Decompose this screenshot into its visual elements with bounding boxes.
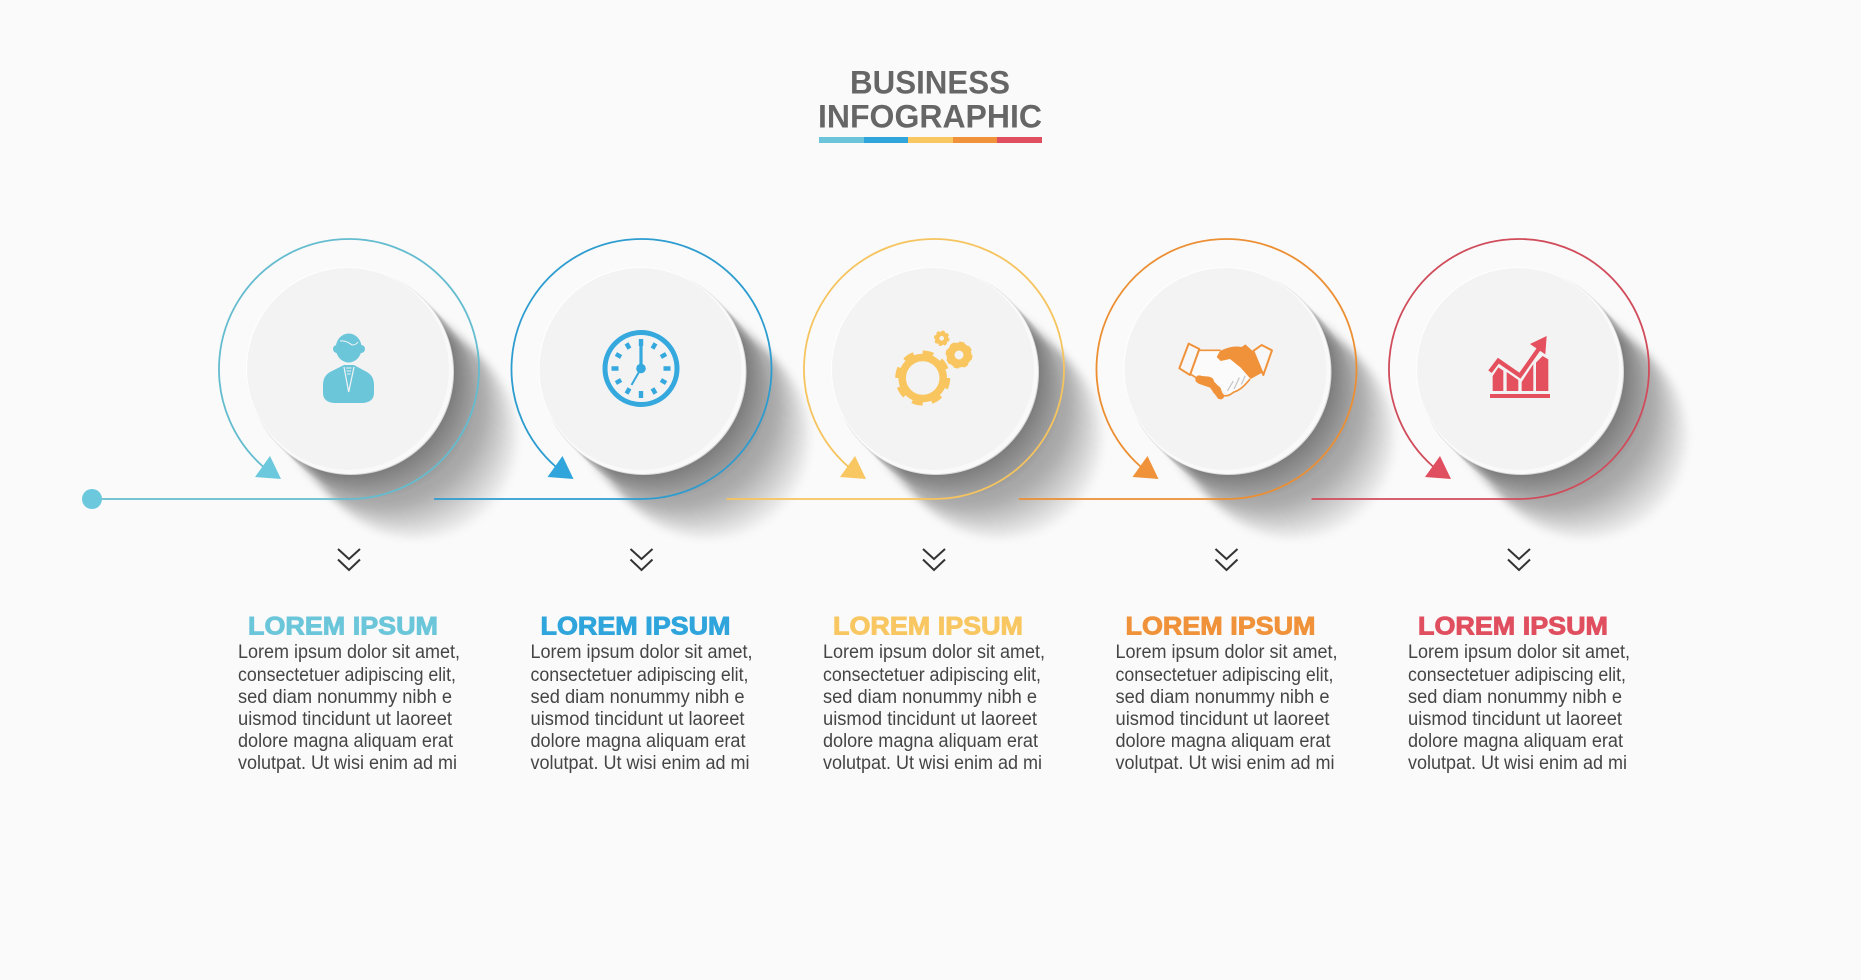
title: INFOGRAPHIC — [818, 98, 1042, 134]
body text 5: Lorem ipsum dolor sit amet, — [1408, 642, 1630, 663]
body text 3: Lorem ipsum dolor sit amet, — [823, 642, 1045, 663]
body text 2: volutpat. Ut wisi enim ad mi — [530, 753, 750, 774]
shadow 4 — [1126, 269, 1396, 540]
chevrons 4 — [1216, 549, 1238, 570]
arrowhead 5 — [1425, 456, 1451, 479]
body text 4 — [1116, 642, 1338, 774]
disc 4 — [1124, 267, 1332, 475]
heading 1: LOREM IPSUM — [248, 612, 438, 640]
arrowhead 2 — [548, 456, 574, 479]
body text 5: volutpat. Ut wisi enim ad mi — [1408, 753, 1627, 774]
arrowhead 1 — [255, 456, 281, 479]
body text 1: sed diam nonummy nibh e — [238, 687, 452, 708]
body text 2: uismod tincidunt ut laoreet — [530, 709, 745, 730]
body text 2: sed diam nonummy nibh e — [530, 687, 744, 708]
body text 5: dolore magna aliquam erat — [1408, 731, 1624, 752]
body text 5: sed diam nonummy nibh e — [1408, 687, 1622, 708]
body text 4: dolore magna aliquam erat — [1116, 731, 1331, 752]
disc 1 — [246, 267, 454, 475]
body text 5: uismod tincidunt ut laoreet — [1408, 709, 1623, 730]
heading 3: LOREM IPSUM — [833, 612, 1023, 640]
disc 3 — [831, 267, 1039, 475]
panel: step 2 — [434, 239, 812, 774]
body text 3: uismod tincidunt ut laoreet — [823, 709, 1038, 730]
chevrons 5 — [1508, 549, 1530, 570]
icon: growth chart — [1490, 336, 1550, 398]
body text 3: volutpat. Ut wisi enim ad mi — [823, 753, 1042, 774]
body text 3: sed diam nonummy nibh e — [823, 687, 1037, 708]
ring and timeline 4 — [1019, 239, 1356, 499]
body text 3 — [823, 642, 1045, 774]
shadow 2 — [541, 269, 812, 540]
panel: step 4 — [1019, 239, 1396, 774]
shadow 3 — [833, 269, 1104, 540]
body text 1: consectetuer adipiscing elit, — [238, 665, 456, 686]
disc 2 — [538, 267, 746, 475]
body text 1: uismod tincidunt ut laoreet — [238, 709, 453, 730]
arrowhead 4 — [1132, 456, 1158, 479]
body text 2: consectetuer adipiscing elit, — [530, 665, 748, 686]
heading 2: LOREM IPSUM — [540, 612, 730, 640]
body text 4: volutpat. Ut wisi enim ad mi — [1116, 753, 1334, 774]
ring and timeline 3 — [726, 239, 1064, 499]
icon: gears — [898, 332, 971, 403]
body text 5 — [1408, 642, 1630, 774]
panel: step 1 — [82, 239, 519, 774]
body text 3: dolore magna aliquam erat — [823, 731, 1039, 752]
icon: businessman — [323, 334, 374, 403]
start dot — [82, 489, 102, 509]
panel: step 3 — [726, 239, 1104, 774]
heading 4: LOREM IPSUM — [1126, 612, 1316, 640]
body text 2: dolore magna aliquam erat — [530, 731, 746, 752]
chevrons 3 — [923, 549, 945, 570]
arrowhead 3 — [840, 456, 866, 479]
ring and timeline 2 — [434, 239, 771, 499]
panel: step 5 — [1312, 239, 1689, 774]
body text 4: Lorem ipsum dolor sit amet, — [1116, 642, 1338, 663]
shadow 1 — [248, 269, 519, 540]
body text 4: consectetuer adipiscing elit, — [1116, 665, 1334, 686]
body text 3: consectetuer adipiscing elit, — [823, 665, 1041, 686]
title: BUSINESS — [850, 64, 1010, 100]
shadow 5 — [1418, 269, 1689, 540]
body text 2 — [530, 642, 752, 774]
disc 5 — [1416, 267, 1624, 475]
icon: clock — [605, 332, 677, 404]
body text 1: dolore magna aliquam erat — [238, 731, 454, 752]
body text 4: sed diam nonummy nibh e — [1116, 687, 1330, 708]
chevrons 1 — [338, 549, 360, 570]
chevrons 2 — [630, 549, 652, 570]
ring and timeline 5 — [1312, 239, 1649, 499]
body text 4: uismod tincidunt ut laoreet — [1116, 709, 1330, 730]
body text 5: consectetuer adipiscing elit, — [1408, 665, 1626, 686]
ring and timeline 1 — [92, 239, 479, 499]
body text 2: Lorem ipsum dolor sit amet, — [530, 642, 752, 663]
body text 1: volutpat. Ut wisi enim ad mi — [238, 753, 457, 774]
title — [818, 64, 1042, 143]
body text 1 — [238, 642, 460, 774]
body text 1: Lorem ipsum dolor sit amet, — [238, 642, 460, 663]
heading 5: LOREM IPSUM — [1418, 612, 1608, 640]
icon: handshake — [1179, 344, 1272, 399]
